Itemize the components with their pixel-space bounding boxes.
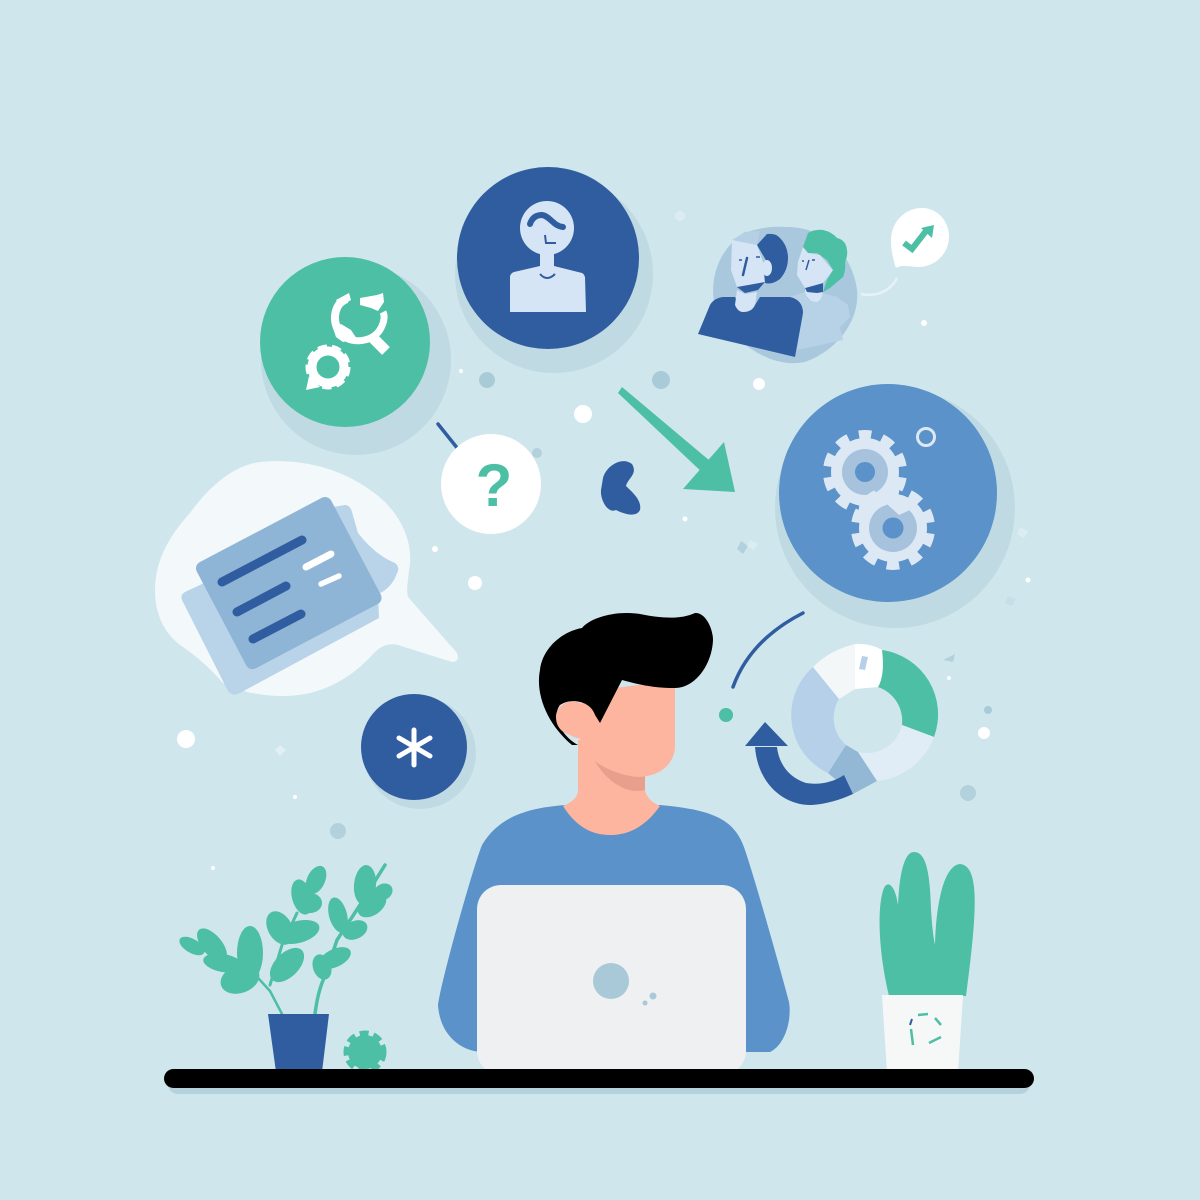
plant: small spiky shrub (346, 1033, 384, 1071)
icon: navy blob (601, 461, 640, 515)
donut green segment (878, 650, 938, 737)
arc line (733, 613, 803, 687)
connector line (438, 424, 458, 449)
man neck (735, 290, 757, 312)
torso and arms (438, 805, 790, 1052)
white pot (882, 995, 963, 1072)
icon: lower gear (857, 492, 929, 564)
panel: navy circle with person (455, 167, 653, 373)
man face (731, 240, 765, 287)
neck and collar (563, 740, 660, 835)
table shadow (168, 1074, 1030, 1094)
arrow: green diagonal (618, 387, 735, 492)
stems (259, 865, 385, 1014)
panel: green circle with gears and magnifier (260, 257, 451, 455)
woman hair (803, 230, 847, 292)
decorative dots and specks (177, 211, 1030, 870)
man shirt (698, 297, 803, 357)
leaves (176, 863, 396, 999)
icon: speech bubble with check mark (861, 208, 949, 295)
donut white segment (855, 644, 883, 689)
main card (194, 495, 384, 672)
back card (181, 505, 398, 695)
icon: small white gear (306, 347, 348, 390)
man jaw shadow (737, 282, 765, 293)
green dot (719, 708, 733, 722)
person (438, 613, 790, 1052)
woman shirt (790, 292, 850, 350)
laptop (477, 885, 746, 1075)
pot (268, 1014, 329, 1072)
donut light blue segment (791, 667, 846, 773)
chart: donut (791, 644, 938, 794)
man hair top (732, 231, 760, 245)
navy text lines (222, 540, 302, 639)
icon: small ring (918, 428, 934, 446)
ear (556, 701, 593, 739)
woman face (797, 247, 833, 288)
icon: magnifier with arrows (333, 293, 386, 351)
panel: blue circle with gears (775, 384, 1015, 628)
white text lines (306, 554, 331, 567)
icon: question mark circle: ? (476, 452, 512, 519)
plant: right cactus in white pot (880, 852, 975, 1072)
neck shadow (593, 750, 645, 791)
woman collar shadow (805, 283, 823, 293)
table (164, 1069, 1034, 1088)
icon: navy asterisk circle (361, 694, 476, 809)
icon: question mark circle (441, 434, 541, 534)
panel: two people discussion (698, 227, 857, 363)
man ear (762, 260, 772, 276)
woman neck (805, 288, 823, 302)
icon: person bust (510, 201, 586, 312)
hair (539, 613, 713, 745)
donut off-white segment (813, 644, 855, 699)
man hair (757, 234, 788, 284)
face (580, 680, 675, 777)
arrow: navy circular arrow (745, 722, 853, 805)
donut mid blue segment (828, 745, 877, 794)
donut pale segment (858, 725, 934, 781)
icon: upper gear (829, 436, 901, 508)
panel: chat bubble with document cards (155, 461, 458, 696)
plant: potted left plant (176, 863, 396, 1072)
